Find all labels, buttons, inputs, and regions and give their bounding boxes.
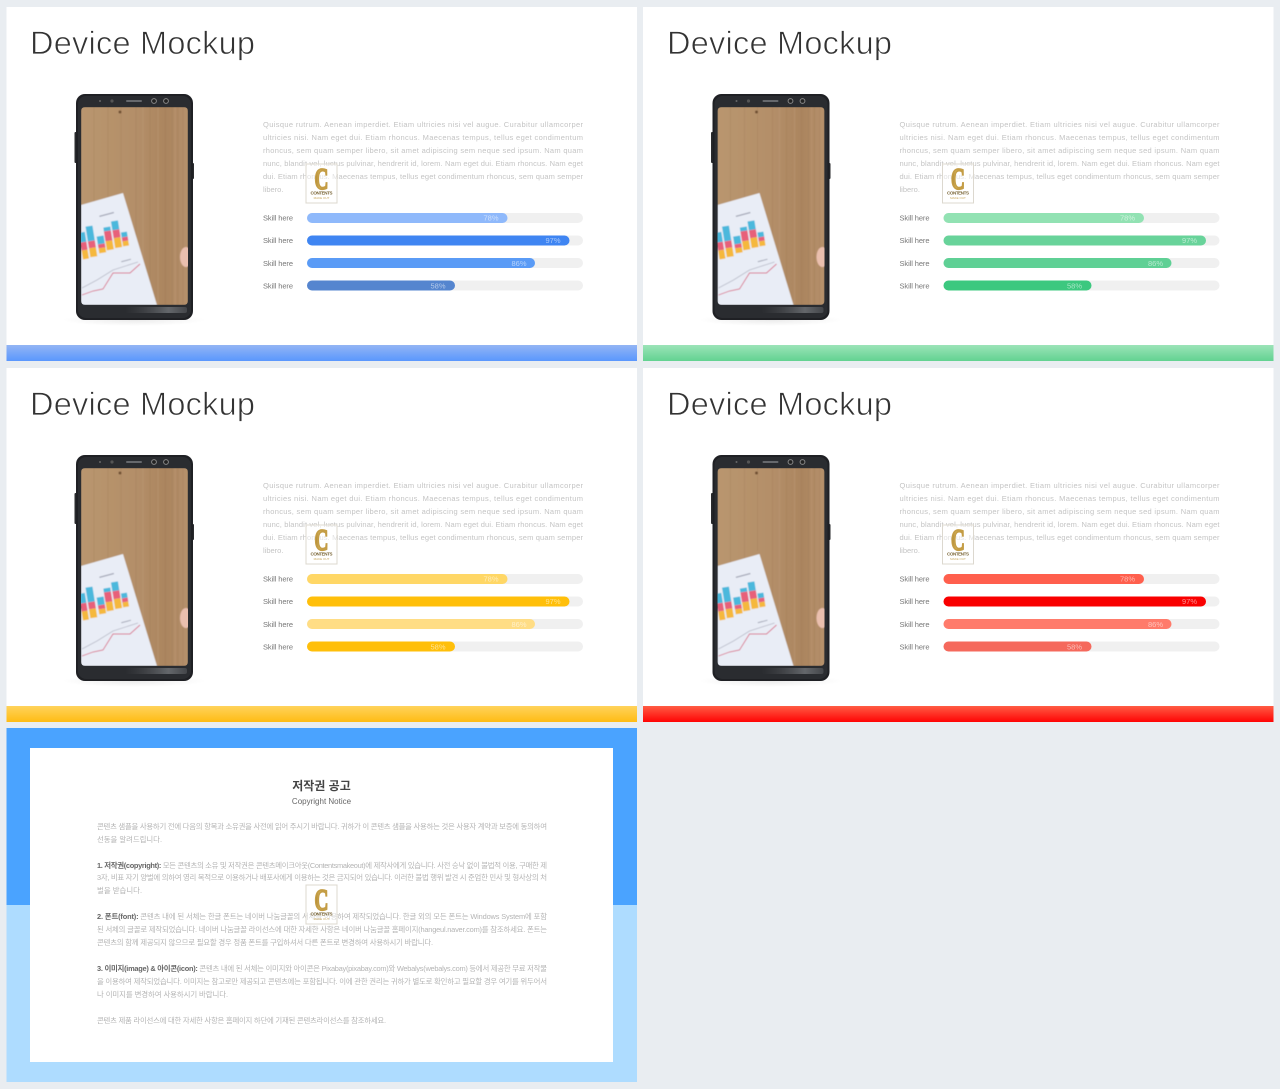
icon: phone mockup <box>62 455 206 687</box>
chart: skill bars: Skill here <box>263 574 293 584</box>
panel: blue device mockup <box>6 7 637 361</box>
text block: font clause: 2. 폰트(font): 콘텐츠 내에 된 서체는 한글 폰트는 네이버 나눔글꼴의 서체를 이용하여 제작되었습니다. 한글 외의 모든 폰트는 Windows System에 포함 <box>97 912 547 921</box>
text block: body copy <box>900 481 1220 555</box>
chart: skill bars: Skill here <box>263 282 293 290</box>
text block: body copy <box>900 120 1220 194</box>
heading: Device Mockup: Device Mockup <box>30 386 255 422</box>
chart: skill bars <box>263 574 583 652</box>
text block: intro <box>97 822 547 844</box>
text block: body copy: rhoncus, sem quam semper libero, sit amet adipiscing sem neque sed ipsum. Nam quam <box>900 507 1220 516</box>
accent band <box>6 345 637 361</box>
chart: skill bars: 97% <box>545 597 561 606</box>
text block: body copy: Quisque rutrum. Aenean imperdiet. Etiam ultricies nisi vel augue. Curabitur ullamcorper <box>263 481 584 490</box>
accent band <box>643 345 1274 361</box>
text block: copyright clause <box>97 861 547 895</box>
text block: license note: 콘텐츠 제품 라이선스에 대한 자세한 사항은 홈페이지 하단에 기재된 콘텐츠라이선스를 참조하세요. <box>97 1016 386 1025</box>
heading: Device Mockup: Device Mockup <box>667 25 892 61</box>
text block: body copy: Quisque rutrum. Aenean imperdiet. Etiam ultricies nisi vel augue. Curabitur ullamcorper <box>263 120 584 129</box>
text block: body copy: rhoncus, sem quam semper libero, sit amet adipiscing sem neque sed ipsum. Nam quam <box>263 507 583 516</box>
text block: image and icon clause: 을 이용하여 제작되었습니다. 이미지는 참고로만 제공되고 콘텐츠에는 포함됩니다. 이에 관한 권리는 귀하가 별도로 확인하고 필요할 경우 여기를 위두어서 <box>97 977 547 986</box>
chart: skill bars: 58% <box>1067 642 1082 652</box>
text block: font clause: 콘텐츠의 함께 제공되지 않으므로 필요할 경우 정품 폰트를 구입하셔서 다른 폰트로 변경하여 사용하시기 바랍니다. <box>97 938 433 947</box>
text block: body copy: dui. Etiam rhoncus. Maecenas tempus, tellus eget condimentum rhoncus, sem quam semper <box>900 533 1220 542</box>
text block: body copy: dui. Etiam rhoncus. Maecenas tempus, tellus eget condimentum rhoncus, sem quam semper <box>263 172 584 181</box>
chart: skill bars: Skill here <box>263 236 293 245</box>
text block: body copy <box>263 120 584 194</box>
chart: skill bars <box>263 213 583 290</box>
icon: phone mockup <box>698 455 842 687</box>
chart: skill bars: Skill here <box>900 642 930 652</box>
text block: body copy: dui. Etiam rhoncus. Maecenas tempus, tellus eget condimentum rhoncus, sem quam semper <box>263 533 584 542</box>
chart: skill bars: Skill here <box>263 642 293 652</box>
text block: copyright clause: 벌을 받습니다. <box>97 886 142 895</box>
text block: image and icon clause: 3. 이미지(image) & 아이콘(icon): 콘텐츠 내에 된 서체는 이미지와 아이콘은 Pixabay(pixabay.com)와 Webalys(webalys.com) 등에서 제공한 무료 저작물 <box>97 964 547 973</box>
text block: font clause <box>97 912 547 947</box>
chart: skill bars: Skill here <box>263 214 293 222</box>
text block: body copy: dui. Etiam rhoncus. Maecenas tempus, tellus eget condimentum rhoncus, sem quam semper <box>900 172 1220 181</box>
chart: skill bars: 86% <box>511 620 527 629</box>
text block: body copy <box>263 481 584 555</box>
chart: skill bars: Skill here <box>900 236 930 245</box>
text block: intro: 선동을 알려드립니다. <box>97 835 162 844</box>
text block: body copy: ultricies nisi. Nam eget dui. Etiam rhoncus. Maecenas tempus, tellus eget condimentum <box>263 494 583 503</box>
chart: skill bars: 78% <box>483 214 499 222</box>
chart: skill bars: Skill here <box>900 282 930 290</box>
text block: image and icon clause <box>97 964 547 999</box>
chart: skill bars: Skill here <box>900 214 930 222</box>
text block: body copy: Quisque rutrum. Aenean imperdiet. Etiam ultricies nisi vel augue. Curabitur ullamcorper <box>900 481 1220 490</box>
panel: green device mockup <box>643 7 1274 361</box>
heading: Device Mockup: Device Mockup <box>30 25 255 61</box>
subheading: Copyright Notice: Copyright Notice <box>292 797 352 806</box>
text block: body copy: Quisque rutrum. Aenean imperdiet. Etiam ultricies nisi vel augue. Curabitur ullamcorper <box>900 120 1220 129</box>
text block: copyright clause: 3자, 비표 자기 양벌에 의하여 영리 목적으로 이용하거나 배포사에게 이용하는 것은 금지되어 있습니다. 이러한 불법 행위 발견 시 준엄한 민사 및 형사상의 처 <box>97 873 547 882</box>
chart: skill bars: Skill here <box>900 574 930 584</box>
text block: body copy: ultricies nisi. Nam eget dui. Etiam rhoncus. Maecenas tempus, tellus eget condimentum <box>263 133 583 142</box>
text block: body copy: libero. <box>263 185 283 194</box>
chart: skill bars: 78% <box>1120 574 1135 584</box>
watermark <box>306 882 337 924</box>
chart: skill bars <box>900 574 1220 652</box>
heading: copyright title: 저작권 공고 <box>292 778 351 793</box>
watermark <box>942 161 974 203</box>
text block: body copy: rhoncus, sem quam semper libero, sit amet adipiscing sem neque sed ipsum. Nam quam <box>900 146 1220 155</box>
text block: body copy: ultricies nisi. Nam eget dui. Etiam rhoncus. Maecenas tempus, tellus eget condimentum <box>900 133 1220 142</box>
chart: skill bars: 58% <box>430 282 446 290</box>
chart: skill bars: 78% <box>483 574 499 584</box>
text block: image and icon clause: 나 이미지를 변경하여 사용하시기 바랍니다. <box>97 990 228 999</box>
chart: skill bars: Skill here <box>263 259 293 268</box>
chart: skill bars: Skill here <box>263 620 293 629</box>
text block: intro: 콘텐츠 샘플을 사용하기 전에 다음의 항목과 소유권을 사전에 읽어 주시기 바랍니다. 귀하가 이 콘텐츠 샘플을 사용하는 것은 사용자 계약과 보증에 동의하여 <box>97 822 547 831</box>
chart: skill bars: 86% <box>1148 259 1163 268</box>
panel: red device mockup <box>643 368 1274 722</box>
chart: skill bars: 58% <box>1067 282 1082 290</box>
chart: skill bars: 78% <box>1120 214 1135 222</box>
text block: body copy: nunc, blandit vel, luctus pulvinar, hendrerit id, lorem. Nam eget dui. Etiam rhoncus. Nam eget <box>900 520 1220 529</box>
watermark <box>306 161 337 203</box>
accent band <box>6 706 637 722</box>
chart: skill bars: Skill here <box>900 620 930 629</box>
chart: skill bars: Skill here <box>263 597 293 606</box>
text block: copyright clause: 1. 저작권(copyright): 모든 콘텐츠의 소유 및 저작권은 콘텐츠메이크아웃(Contentsmakeout)에 제작사에게 있습니다. 사전 승낙 없이 불법적 이용, 구매한 제 <box>97 861 547 870</box>
panel: yellow device mockup <box>6 368 637 722</box>
accent band <box>643 706 1274 722</box>
chart: skill bars: 86% <box>1148 620 1163 629</box>
chart: skill bars: Skill here <box>900 597 930 606</box>
text block: body copy: nunc, blandit vel, luctus pulvinar, hendrerit id, lorem. Nam eget dui. Etiam rhoncus. Nam eget <box>263 520 584 529</box>
watermark <box>942 522 974 564</box>
chart: skill bars: 97% <box>545 236 561 245</box>
chart: skill bars: 58% <box>430 642 446 652</box>
text block: font clause: 된 서체의 글꼴로 제작되었습니다. 네이버 나눔글꼴 라이선스에 대한 자세한 사항은 네이버 나눔글꼴 홈페이지(hangeul.naver.com)를 참조하세요. 폰트는 <box>97 925 547 934</box>
text block: body copy: nunc, blandit vel, luctus pulvinar, hendrerit id, lorem. Nam eget dui. Etiam rhoncus. Nam eget <box>900 159 1220 168</box>
text block: body copy: libero. <box>900 185 920 194</box>
heading: Device Mockup: Device Mockup <box>667 386 892 422</box>
chart: skill bars: 86% <box>511 259 527 268</box>
chart: skill bars: 97% <box>1182 597 1197 606</box>
chart: skill bars: 97% <box>1182 236 1197 245</box>
icon: phone mockup <box>698 94 842 326</box>
chart: skill bars: Skill here <box>900 259 930 268</box>
text block: body copy: ultricies nisi. Nam eget dui. Etiam rhoncus. Maecenas tempus, tellus eget condimentum <box>900 494 1220 503</box>
watermark <box>306 522 337 564</box>
icon: phone mockup <box>62 94 206 326</box>
text block: body copy: libero. <box>900 546 920 555</box>
chart: skill bars <box>900 213 1220 290</box>
text block: body copy: rhoncus, sem quam semper libero, sit amet adipiscing sem neque sed ipsum. Nam quam <box>263 146 583 155</box>
text block: body copy: libero. <box>263 546 283 555</box>
panel: copyright notice <box>6 728 637 1082</box>
text block: body copy: nunc, blandit vel, luctus pulvinar, hendrerit id, lorem. Nam eget dui. Etiam rhoncus. Nam eget <box>263 159 584 168</box>
